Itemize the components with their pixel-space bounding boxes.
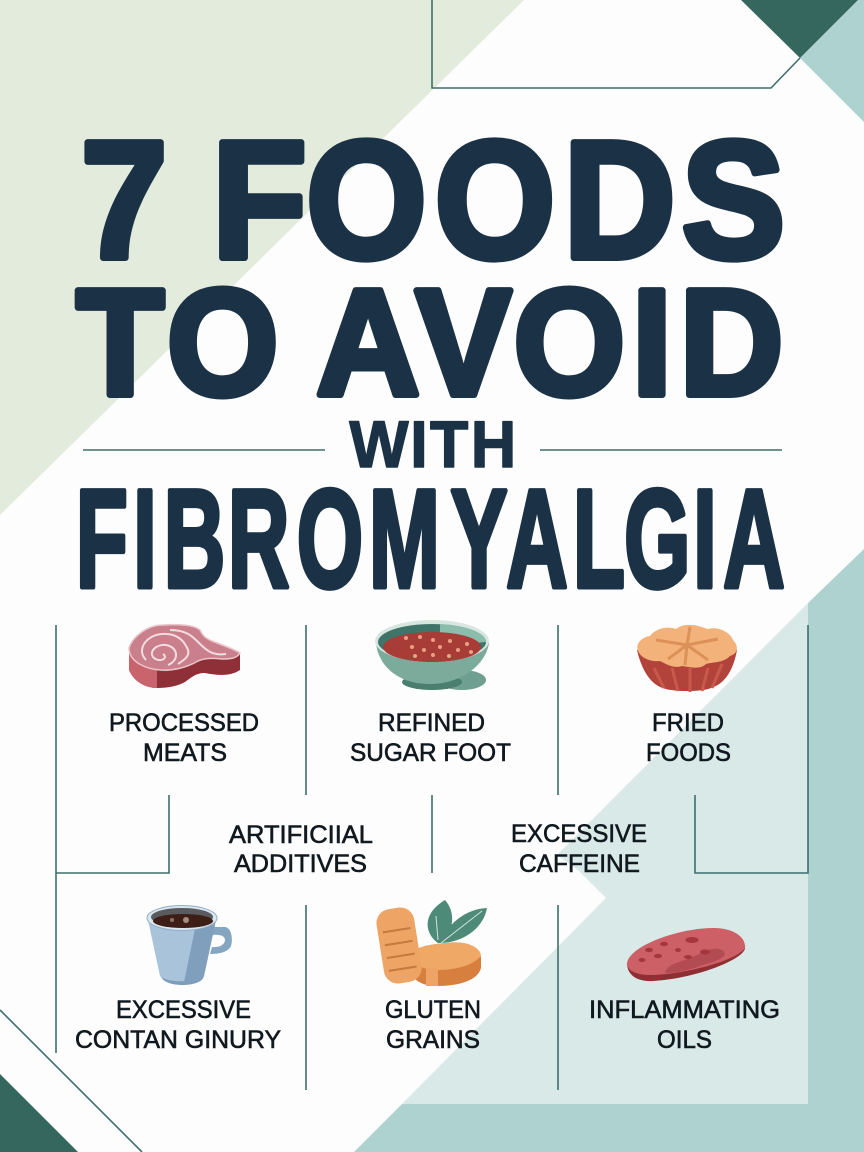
item: fried foods (637, 625, 737, 767)
icon: coffee cup (147, 906, 232, 985)
background shape: pale green triangle (0, 0, 524, 515)
item: processed meats: MEATS (143, 739, 227, 767)
icon: steak (129, 625, 240, 688)
item: gluten grains: GRAINS (386, 1026, 480, 1054)
item: processed meats (109, 625, 259, 767)
title: 7 FOODS (81, 107, 785, 294)
item: artificial additives (229, 821, 373, 878)
item: fried foods: FOODS (646, 739, 731, 767)
title: WITH (349, 408, 516, 481)
label: FRIED (652, 709, 724, 737)
item: refined sugar foot (350, 620, 511, 767)
item: inflammating oils: OILS (657, 1026, 712, 1054)
item: gluten grains (374, 900, 487, 1054)
item: excessive contan ginury (75, 906, 281, 1054)
title (76, 107, 785, 617)
background shape: dark green corner bottom left (0, 1074, 78, 1152)
item: artificial additives: ADDITIVES (234, 850, 367, 878)
background shape: teal lower right (354, 549, 864, 1152)
background shape: dark green corner top right (741, 0, 858, 58)
item: excessive contan ginury: CONTAN GINURY (75, 1026, 281, 1054)
label: REFINED (378, 709, 485, 737)
title: TO AVOID (76, 259, 783, 427)
label: INFLAMMATING (589, 996, 780, 1024)
item: inflammating oils (589, 928, 780, 1054)
title: FIBROMYALGIA (76, 460, 785, 617)
label: GLUTEN (385, 996, 481, 1024)
background shape: teal corner top right (800, 0, 864, 122)
icon: fried pastry (637, 625, 737, 692)
label: EXCESSIVE (116, 996, 251, 1024)
background shape: pale teal panel (402, 603, 808, 1104)
item: excessive caffeine: CAFFEINE (519, 850, 640, 878)
icon: soup bowl (375, 620, 489, 690)
label: EXCESSIVE (511, 820, 647, 848)
icon: sausage slice (627, 928, 745, 981)
item: refined sugar foot: SUGAR FOOT (350, 739, 511, 767)
item: excessive caffeine (511, 820, 647, 878)
label: ARTIFICIIAL (229, 821, 373, 849)
icon: bread and leaves (374, 900, 487, 986)
label: PROCESSED (109, 709, 259, 737)
